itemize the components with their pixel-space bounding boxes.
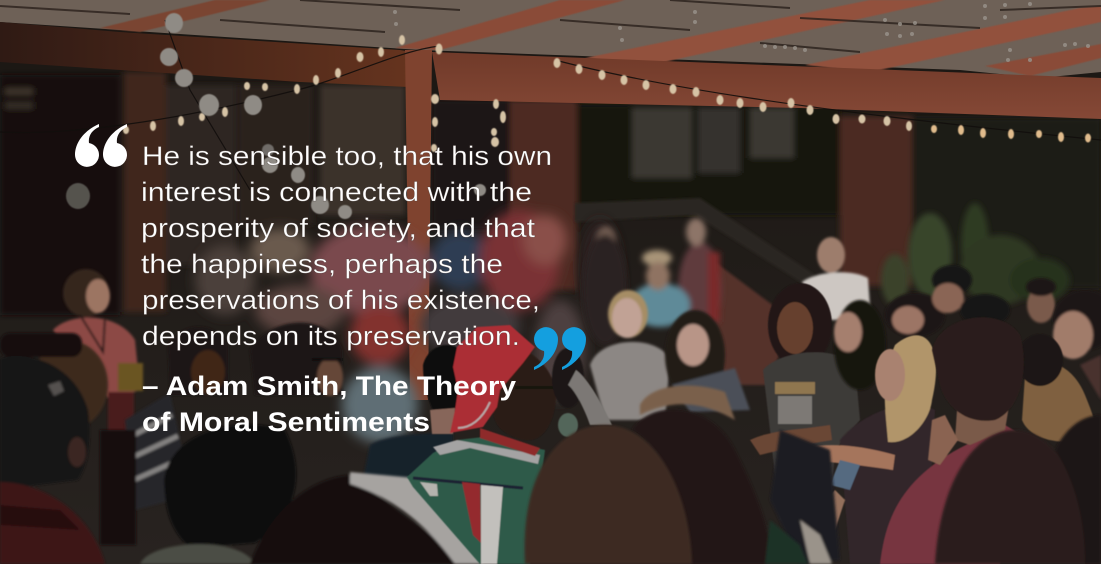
windows and brick columns <box>0 72 1101 315</box>
quote text: depends on its preservation. <box>142 321 520 351</box>
ceiling panels <box>0 0 1101 78</box>
woman in grey shirt <box>590 290 670 420</box>
people on the stairs <box>583 218 722 345</box>
attribution: of Moral Sentiments <box>142 407 430 437</box>
stair rail and brick landing <box>575 198 815 385</box>
string lights <box>0 2 1101 219</box>
quote text: interest is connected with the <box>141 177 532 207</box>
man in striped shirt with red cap <box>407 325 612 564</box>
attribution: – Adam Smith, The Theory <box>142 371 516 401</box>
dark-haired women behind <box>834 265 1056 390</box>
man with dark hair from behind in red shirt <box>880 317 1030 564</box>
foreground brown head <box>525 425 692 564</box>
quote text: preservations of his existence, <box>142 285 540 315</box>
brown-haired woman and black hat <box>0 333 108 429</box>
woman in pink with lanyard <box>53 269 143 432</box>
quote text: prosperity of society, and that <box>141 213 536 243</box>
foreground heads <box>632 386 1101 564</box>
icon: opening quote mark <box>75 124 127 167</box>
greenery <box>881 203 1070 306</box>
woman with blonde hair, arm outstretched <box>785 335 936 564</box>
quote text <box>141 141 552 351</box>
quote text: the happiness, perhaps the <box>141 249 503 279</box>
icon: closing quote mark <box>534 327 586 370</box>
dark figures lower left <box>0 333 483 564</box>
woman in grey t-shirt <box>750 283 860 520</box>
blurred mid crowd behind the quote <box>195 210 620 443</box>
man in white shirt <box>802 237 871 320</box>
ceiling joist shadows <box>0 0 1101 52</box>
main beam right <box>432 52 1101 119</box>
support post <box>405 50 432 400</box>
man at right edge <box>1053 290 1101 400</box>
crowd faces behind the attribution <box>168 323 453 480</box>
main beam left <box>0 22 430 88</box>
woman's skirt and papers <box>770 430 840 564</box>
quote text: He is sensible too, that his own <box>142 141 552 171</box>
ceiling rafters <box>100 0 1101 76</box>
attribution <box>142 371 516 437</box>
woman with long hair seen from behind <box>1017 334 1094 442</box>
laughing woman with dark hair <box>665 310 750 412</box>
